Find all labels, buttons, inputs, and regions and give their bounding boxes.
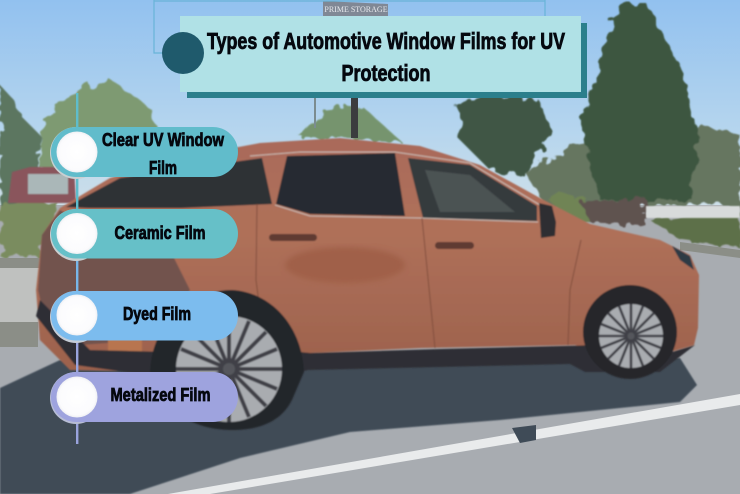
front wheel — [599, 304, 663, 368]
title text: Types of Automotive Window Films for UV — [207, 28, 566, 54]
title panel — [162, 16, 587, 98]
item 1: Clear UV Window Film: Film — [149, 158, 177, 178]
parking line — [168, 394, 740, 494]
decorative frame behind title — [154, 0, 545, 53]
item 4: Metalized Film — [50, 372, 238, 424]
item 1: Clear UV Window Film — [50, 127, 238, 179]
title circle — [162, 32, 204, 74]
rear glass and side windows — [66, 153, 537, 221]
item 2: Ceramic Film — [50, 209, 238, 261]
headlight — [672, 246, 694, 270]
item 4: Metalized Film: Metalized Film — [110, 385, 210, 405]
background: parked red car — [8, 167, 76, 203]
title text: Protection — [342, 60, 430, 86]
timeline vertical line — [76, 93, 78, 444]
background: sign and poles — [314, 1, 388, 138]
background: white strip behind shrubs — [646, 206, 740, 218]
background: sign and poles: PRIME STORAGE — [324, 5, 388, 14]
orange lower rear patch — [108, 338, 142, 352]
door seams and handles — [256, 204, 581, 350]
rear wheel arch and tyre — [150, 290, 304, 430]
reflection on car door — [285, 247, 405, 283]
background: light pavement at left — [0, 268, 60, 322]
car body — [36, 138, 699, 372]
lower sill — [36, 300, 695, 378]
car — [36, 138, 699, 430]
background: kerb — [0, 242, 740, 347]
item 3: Dyed Film: Dyed Film — [123, 304, 191, 324]
item 1: Clear UV Window Film: Clear UV Window — [102, 130, 225, 150]
background: trees and shrubs — [0, 5, 740, 256]
title shadow — [187, 23, 587, 98]
title background — [180, 16, 581, 92]
ground shadow of the car — [0, 355, 697, 494]
background: pavement — [0, 205, 740, 494]
item 2: Ceramic Film: Ceramic Film — [114, 223, 206, 243]
background: sky — [0, 0, 740, 215]
title text — [207, 28, 566, 86]
mirror — [539, 203, 556, 238]
window trim — [250, 152, 540, 222]
front wheel arch and tyre — [583, 285, 677, 379]
rear wheel — [176, 316, 282, 422]
dark rear quarter — [38, 210, 190, 345]
item 3: Dyed Film — [50, 291, 238, 343]
